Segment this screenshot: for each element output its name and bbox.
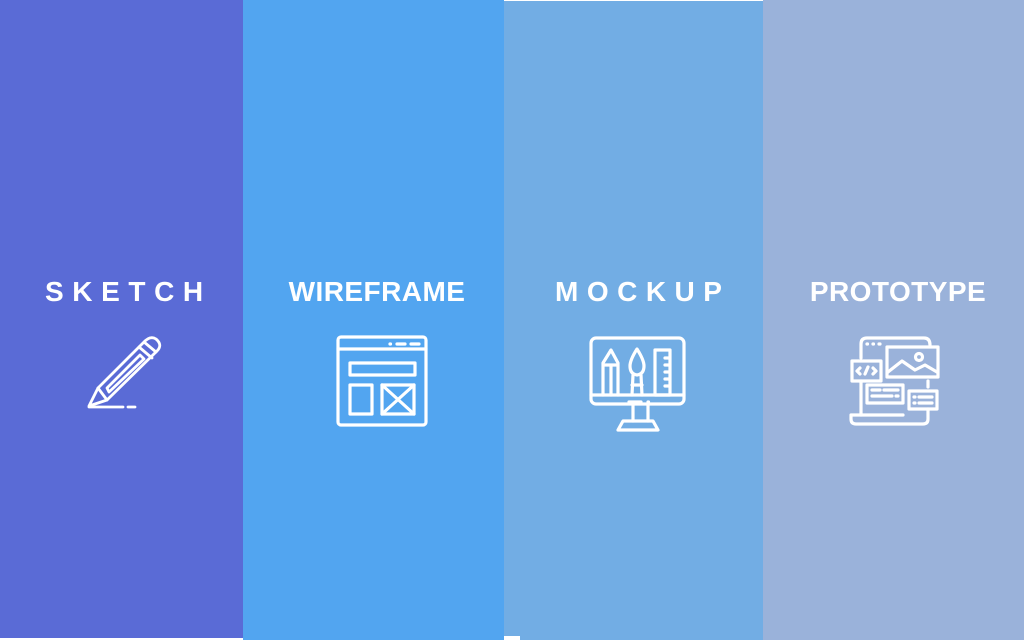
icon: prototype devices <box>851 338 938 424</box>
heading: wireframe: WIREFRAME <box>289 276 465 307</box>
heading: mockup: MOCKUP <box>555 276 730 307</box>
heading: prototype: PROTOTYPE <box>810 276 986 307</box>
panel: sketch <box>0 0 243 638</box>
panel: prototype <box>763 0 1024 640</box>
icon: pencil <box>89 338 160 407</box>
icon: wireframe browser <box>338 337 426 425</box>
icon: mockup monitor <box>591 338 684 430</box>
heading: sketch: SKETCH <box>45 276 212 307</box>
panel: wireframe <box>243 0 504 640</box>
panel: mockup <box>504 1 763 640</box>
notch at mockup bottom <box>504 636 520 640</box>
